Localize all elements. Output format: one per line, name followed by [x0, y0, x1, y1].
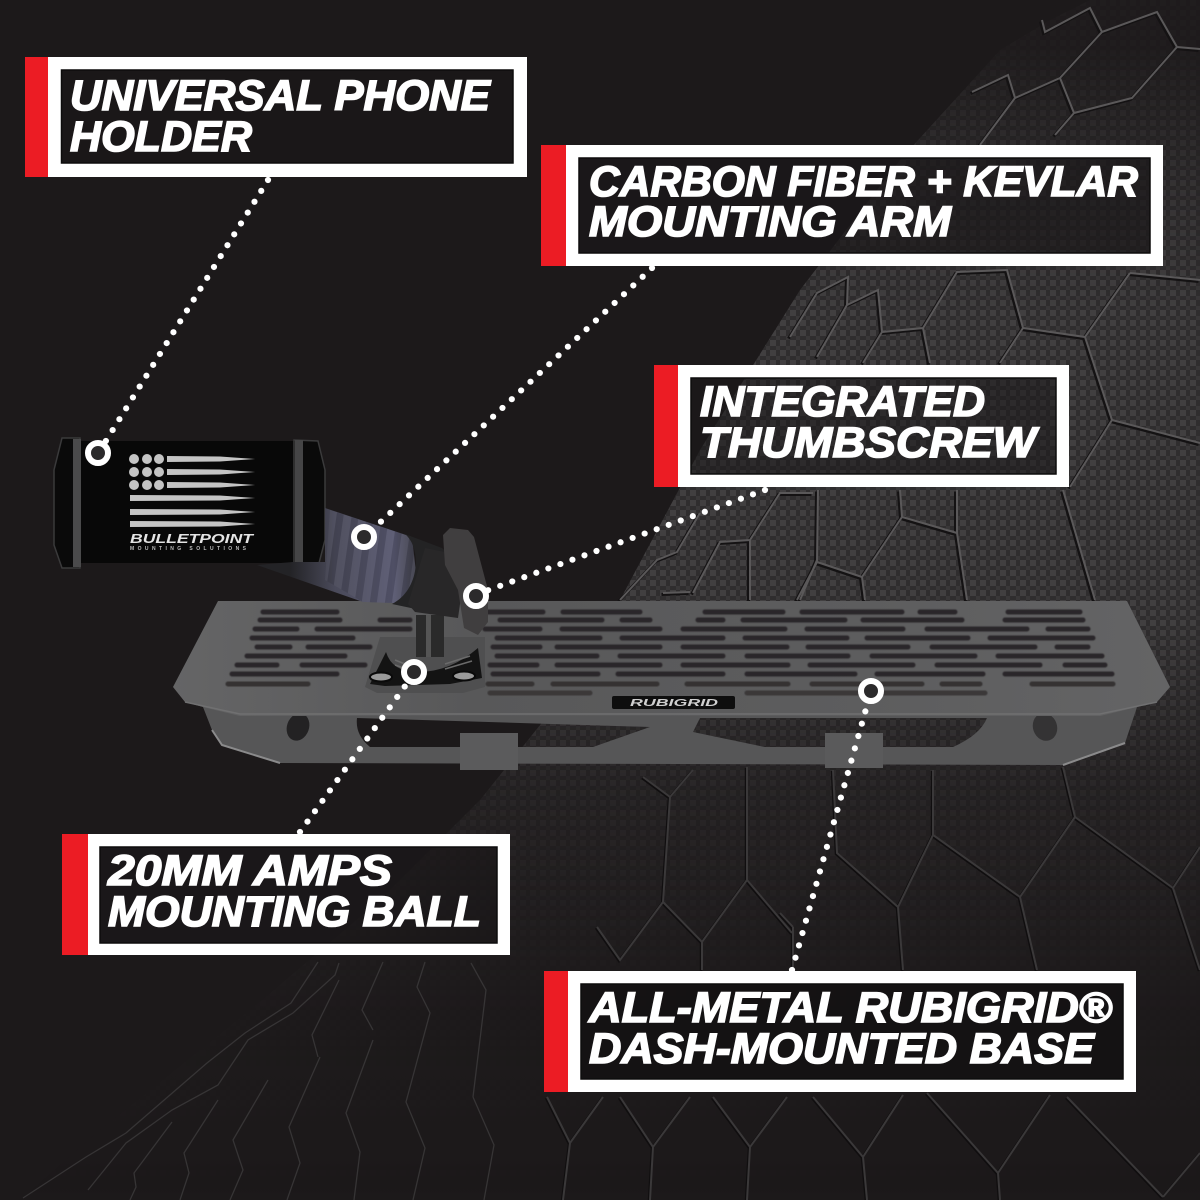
frame underside: [203, 700, 1137, 765]
ball mount: [365, 615, 485, 693]
callout: 20mm amps mounting ball: [62, 834, 510, 955]
frame tab left: [460, 733, 518, 770]
brand text: BULLETPOINT: [130, 531, 254, 546]
mount screws right: [453, 672, 475, 680]
callout: all-metal rubigrid dash-mounted base: DASH-MOUNTED BASE: [589, 1025, 1095, 1073]
flag logo: [129, 454, 255, 527]
callout: universal phone holder: [25, 57, 527, 177]
plate front highlight: [185, 702, 1157, 714]
callout: universal phone holder: UNIVERSAL PHONE: [70, 72, 491, 120]
leader line: base: [792, 702, 868, 970]
callout: carbon fiber kevlar mounting arm: CARBON FIBER + KEVLAR: [589, 158, 1138, 206]
mount ribs: [395, 656, 472, 672]
callout: integrated thumbscrew: INTEGRATED: [700, 378, 985, 426]
plate slots: [228, 612, 1113, 693]
mount stem: [416, 615, 444, 657]
mount stem highlight: [426, 615, 431, 657]
leader line: arm: [372, 268, 652, 530]
marker: thumbscrew: [466, 586, 486, 606]
clamp body: [408, 548, 462, 618]
callout: carbon fiber kevlar mounting arm: [541, 145, 1163, 266]
callout: integrated thumbscrew: [654, 365, 1069, 487]
marker: phone holder: [88, 443, 108, 463]
callout: carbon fiber kevlar mounting arm: MOUNTING ARM: [589, 198, 952, 246]
callout: integrated thumbscrew: THUMBSCREW: [700, 419, 1040, 467]
holder left grip: [54, 438, 80, 568]
holder body: [81, 441, 294, 563]
frame holes: [283, 710, 313, 744]
mount plate: [365, 637, 485, 693]
holder left grip bevel: [73, 439, 81, 567]
leader line: ball: [300, 682, 408, 832]
plate badge text: RUBIGRID: [630, 698, 718, 709]
plate top: [173, 601, 1170, 716]
callout: universal phone holder: HOLDER: [70, 113, 252, 161]
callout: 20mm amps mounting ball: 20MM AMPS: [107, 847, 392, 895]
callout: all-metal rubigrid dash-mounted base: ALL-METAL RUBIGRID®: [588, 984, 1112, 1032]
holder right grip: [294, 440, 325, 567]
arm collar: [392, 534, 450, 612]
holder right grip bevel: [295, 440, 303, 566]
phone holder: [54, 438, 325, 568]
frame left highlight: [212, 730, 280, 763]
base plate: [173, 601, 1170, 770]
frame tab right: [825, 733, 883, 768]
leader line: thumbscrew: [486, 490, 765, 591]
callout: 20mm amps mounting ball: MOUNTING BALL: [108, 888, 481, 936]
mount screws left: [370, 672, 392, 682]
brand tagline: MOUNTING SOLUTIONS: [130, 546, 247, 552]
callout: all-metal rubigrid dash-mounted base: [544, 971, 1136, 1092]
marker: arm: [354, 527, 374, 547]
thumbscrew knob: [443, 528, 488, 635]
marker: base: [861, 681, 881, 701]
frame right highlight: [1063, 743, 1125, 765]
mount dark ring: [370, 648, 482, 686]
leader line: phone holder: [104, 180, 268, 444]
carbon fiber arm: [257, 508, 488, 635]
marker: ball: [404, 662, 424, 682]
plate badge: [612, 696, 735, 709]
